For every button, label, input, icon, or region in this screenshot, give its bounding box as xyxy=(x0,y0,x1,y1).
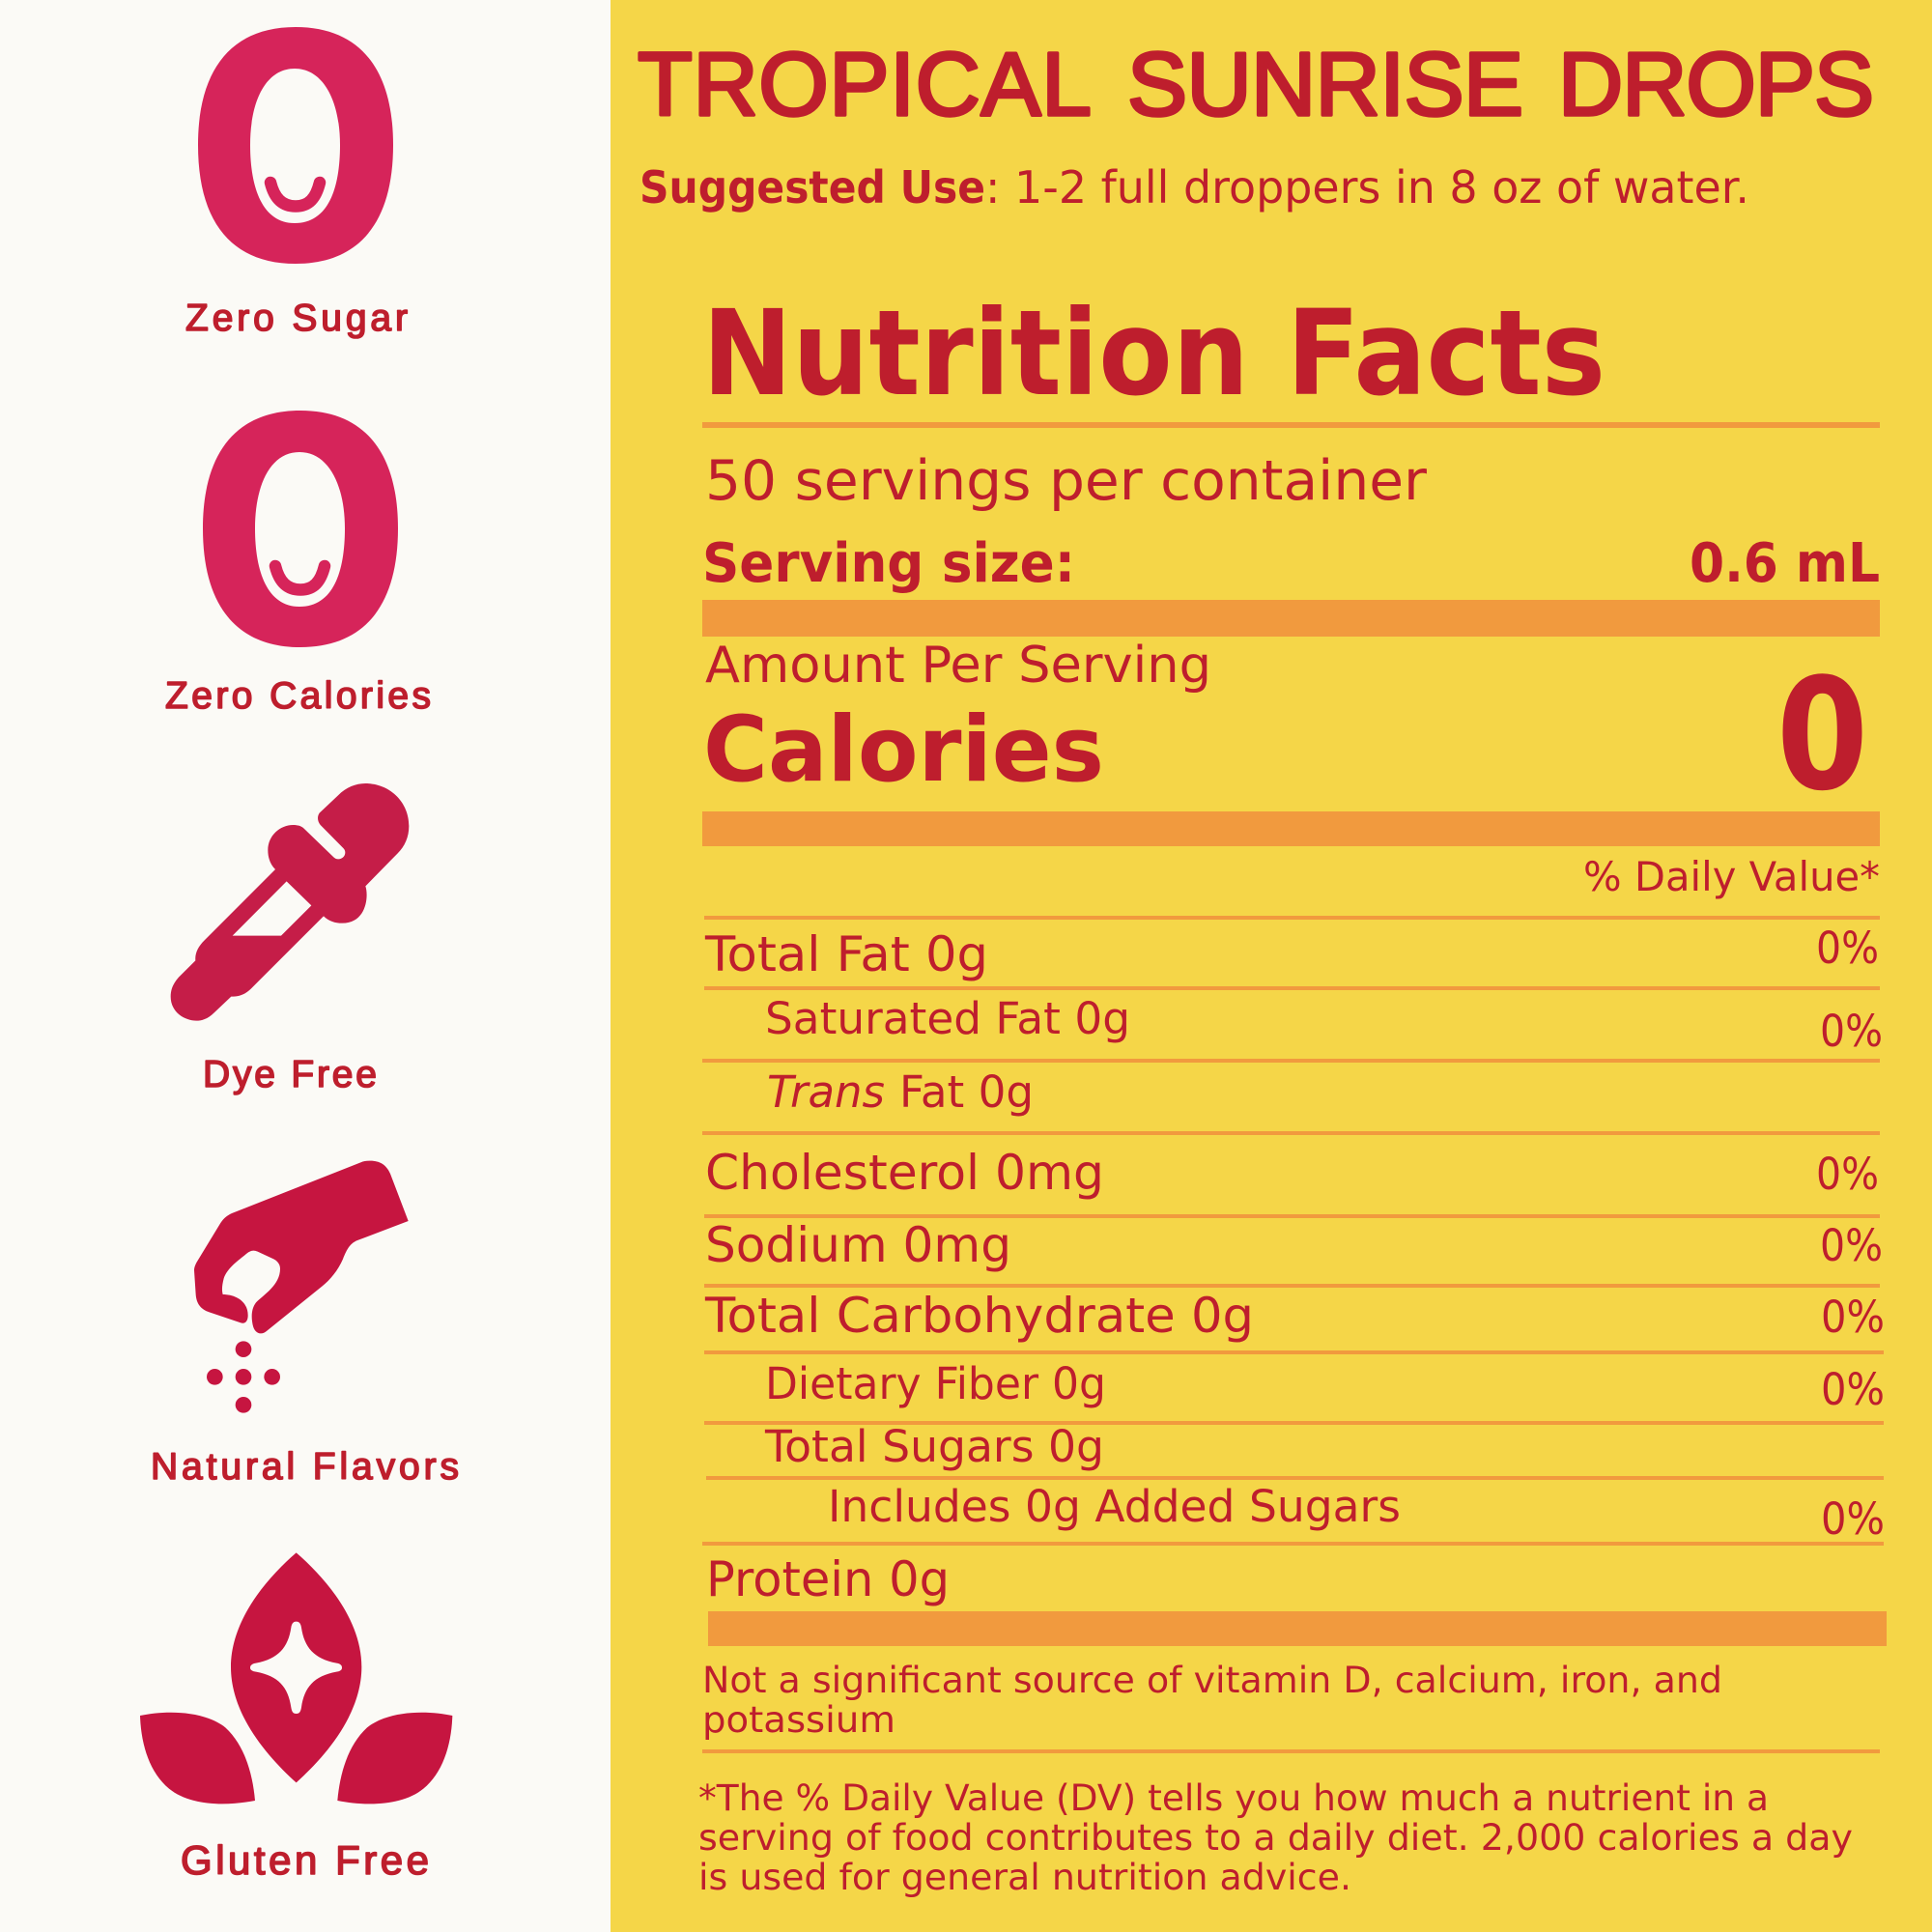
row: total carbohydrate: 0% xyxy=(1821,1292,1885,1343)
row: saturated fat xyxy=(765,993,1883,1057)
panel: benefit icons xyxy=(140,27,459,1883)
servings per container: 50 servings per container xyxy=(705,449,1428,513)
row: added sugars: Includes 0g Added Sugars xyxy=(828,1481,1401,1532)
label: gluten free: Gluten Free xyxy=(181,1837,429,1883)
daily value footnote: *The % Daily Value (DV) tells you how much a nutrient in a xyxy=(698,1777,1769,1819)
icon: dropper xyxy=(171,783,409,1021)
heading: nutrition facts: Nutrition Facts xyxy=(702,285,1605,422)
row: saturated fat: 0% xyxy=(1820,1006,1883,1057)
suggested use: Suggested Use xyxy=(639,161,985,213)
label: zero calories: Zero Calories xyxy=(165,675,431,717)
row: sodium: 0% xyxy=(1820,1220,1883,1271)
calories xyxy=(703,644,1868,825)
row: dietary fiber xyxy=(765,1358,1885,1415)
row: sodium: Sodium 0mg xyxy=(705,1217,1011,1273)
suggested use xyxy=(639,161,1749,213)
row: added sugars xyxy=(828,1481,1885,1545)
row: saturated fat: Saturated Fat 0g xyxy=(765,993,1130,1044)
calories: 0 xyxy=(1776,644,1868,825)
vitamins note xyxy=(702,1660,1722,1741)
row: total carbohydrate xyxy=(704,1288,1885,1344)
suggested use: : 1-2 full droppers in 8 oz of water. xyxy=(985,161,1749,213)
row: added sugars: 0% xyxy=(1821,1493,1885,1545)
panel: white background xyxy=(0,0,611,1932)
row: trans fat: Fat 0g xyxy=(899,1066,1034,1118)
serving size: Serving size: xyxy=(702,532,1075,595)
row: total sugars: Total Sugars 0g xyxy=(764,1421,1104,1472)
daily value footnote xyxy=(698,1777,1853,1898)
row: total carbohydrate: Total Carbohydrate 0g xyxy=(704,1288,1254,1344)
title xyxy=(638,34,1874,134)
amount per serving: Amount Per Serving xyxy=(705,637,1211,695)
row: dietary fiber: Dietary Fiber 0g xyxy=(765,1358,1106,1409)
row: protein: Protein 0g xyxy=(706,1551,950,1607)
label: zero sugar: Zero Sugar xyxy=(185,298,408,339)
icon: hand sprinkling flavors xyxy=(194,1161,409,1413)
panel: nutrition facts xyxy=(698,285,1887,1898)
row: cholesterol: Cholesterol 0mg xyxy=(705,1145,1104,1201)
label: natural flavors: Natural Flavors xyxy=(151,1446,459,1488)
serving size: 0.6 mL xyxy=(1690,532,1880,595)
vitamins note: Not a significant source of vitamin D, calcium, iron, and xyxy=(702,1660,1722,1701)
daily value footnote: serving of food contributes to a daily diet. 2,000 calories a day xyxy=(698,1817,1853,1859)
row: dietary fiber: 0% xyxy=(1821,1364,1885,1415)
vitamins note: potassium xyxy=(702,1699,895,1741)
panel: yellow nutrition background xyxy=(611,0,1932,1932)
row: trans fat: Trans xyxy=(767,1066,885,1118)
title: DROPS xyxy=(1558,34,1874,134)
title: TROPICAL xyxy=(638,34,1092,134)
daily value header: % Daily Value* xyxy=(1583,853,1880,900)
icon: zero sugar xyxy=(198,27,393,264)
row: total fat: Total Fat 0g xyxy=(704,926,988,982)
serving size xyxy=(702,532,1880,595)
label: dye free: Dye Free xyxy=(203,1054,377,1095)
row: sodium xyxy=(705,1217,1883,1273)
calories: Calories xyxy=(703,697,1104,803)
row: total fat: 0% xyxy=(1816,923,1879,974)
row: trans fat xyxy=(767,1066,1034,1118)
daily value footnote: is used for general nutrition advice. xyxy=(698,1857,1351,1898)
row: cholesterol xyxy=(705,1145,1879,1201)
title: SUNRISE xyxy=(1127,34,1523,134)
icon: zero calories xyxy=(203,411,398,647)
row: cholesterol: 0% xyxy=(1816,1149,1879,1200)
row: total fat xyxy=(704,923,1879,982)
icon: leaves with star xyxy=(140,1552,452,1804)
